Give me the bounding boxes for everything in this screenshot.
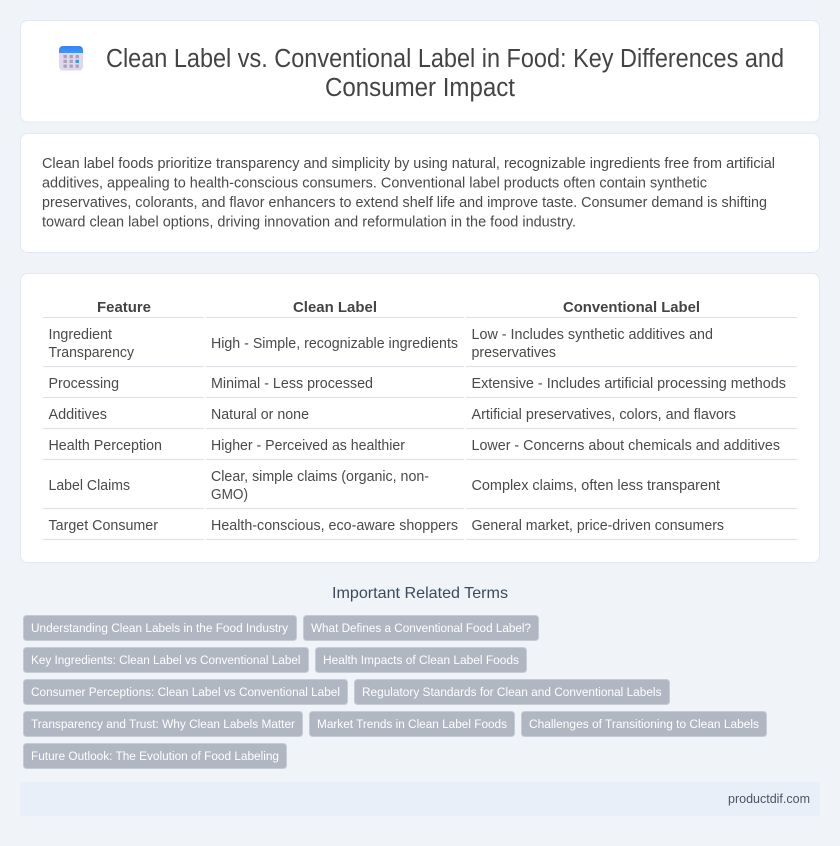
row: ingredient transparency: Ingredient	[48, 327, 112, 343]
row: health perception: Higher - Perceived as healthier	[211, 438, 405, 454]
table header row: Feature	[97, 299, 151, 316]
row: target consumer	[48, 518, 724, 534]
row: target consumer: Target Consumer	[48, 518, 158, 534]
heading: page title	[106, 45, 784, 102]
row: health perception: Health Perception	[48, 438, 162, 454]
panel: comparison table	[20, 274, 820, 562]
row: ingredient transparency: preservatives	[472, 345, 556, 361]
row: ingredient transparency: Transparency	[48, 345, 135, 361]
row: label claims: GMO)	[211, 487, 248, 503]
table header row	[97, 299, 700, 316]
footer bar	[20, 782, 820, 816]
row: target consumer: General market, price-driven consumers	[472, 518, 724, 534]
row: health perception	[48, 438, 780, 454]
chip row 4: Challenges of Transitioning to Clean Labels	[529, 717, 759, 731]
chip row 3: Consumer Perceptions: Clean Label vs Conventional Label	[31, 685, 340, 699]
heading: page title: Consumer Impact	[325, 74, 515, 102]
chip row 2	[24, 648, 526, 672]
row: label claims	[48, 469, 720, 503]
icon: calendar	[59, 46, 83, 70]
chip row 4	[24, 712, 766, 736]
panel: related term chips	[24, 616, 766, 768]
table header row: Conventional Label	[563, 299, 700, 316]
row: additives: Additives	[48, 407, 107, 423]
row: ingredient transparency: High - Simple, recognizable ingredients	[211, 336, 458, 352]
row: label claims: Label Claims	[48, 478, 130, 494]
panel: intro text: Clean label foods prioritize transparency and simplicity by using natural, recognizable ingredients free from artificial	[42, 156, 775, 172]
panel: title header	[20, 20, 820, 122]
chip row 5	[24, 744, 286, 768]
heading: important related terms: Important Related Terms	[332, 585, 508, 602]
chip row 3: Regulatory Standards for Clean and Conventional Labels	[362, 685, 662, 699]
panel: intro text: additives, appealing to health-conscious consumers. Conventional label products often contain synthetic	[42, 176, 707, 192]
row: processing: Extensive - Includes artificial processing methods	[472, 376, 786, 392]
panel: intro text: toward clean label options, driving innovation and reformulation in the food industry.	[42, 214, 576, 230]
heading: page title: Clean Label vs. Conventional Label in Food: Key Differences and	[106, 45, 784, 73]
chip row 1	[24, 616, 538, 640]
row: processing: Minimal - Less processed	[211, 376, 373, 392]
chip row 3	[24, 680, 670, 704]
row: label claims: Clear, simple claims (organic, non-	[211, 469, 429, 485]
row: ingredient transparency	[48, 327, 713, 361]
chip row 5: Future Outlook: The Evolution of Food Labeling	[31, 749, 279, 763]
table header row: Clean Label	[293, 299, 377, 316]
row: processing: Processing	[48, 376, 119, 392]
row: additives: Artificial preservatives, colors, and flavors	[472, 407, 736, 423]
chip row 1: Understanding Clean Labels in the Food Industry	[31, 621, 289, 635]
footer bar: productdif.com	[728, 791, 810, 806]
row: additives	[48, 407, 736, 423]
panel: intro text: preservatives, colorants, and flavor enhancers to extend shelf life and improve taste. Consumer demand is shifting	[42, 195, 767, 211]
chip row 4: Market Trends in Clean Label Foods	[317, 717, 507, 731]
row: additives: Natural or none	[211, 407, 309, 423]
row: target consumer: Health-conscious, eco-aware shoppers	[211, 518, 458, 534]
row: ingredient transparency: Low - Includes synthetic additives and	[472, 327, 713, 343]
row: label claims: Complex claims, often less transparent	[472, 478, 720, 494]
chip row 4: Transparency and Trust: Why Clean Labels Matter	[31, 717, 295, 731]
panel: intro text	[20, 134, 820, 252]
row: health perception: Lower - Concerns about chemicals and additives	[472, 438, 780, 454]
chip row 2: Key Ingredients: Clean Label vs Conventional Label	[31, 653, 300, 667]
chip row 1: What Defines a Conventional Food Label?	[311, 621, 531, 635]
row: processing	[48, 376, 786, 392]
chip row 2: Health Impacts of Clean Label Foods	[323, 653, 519, 667]
